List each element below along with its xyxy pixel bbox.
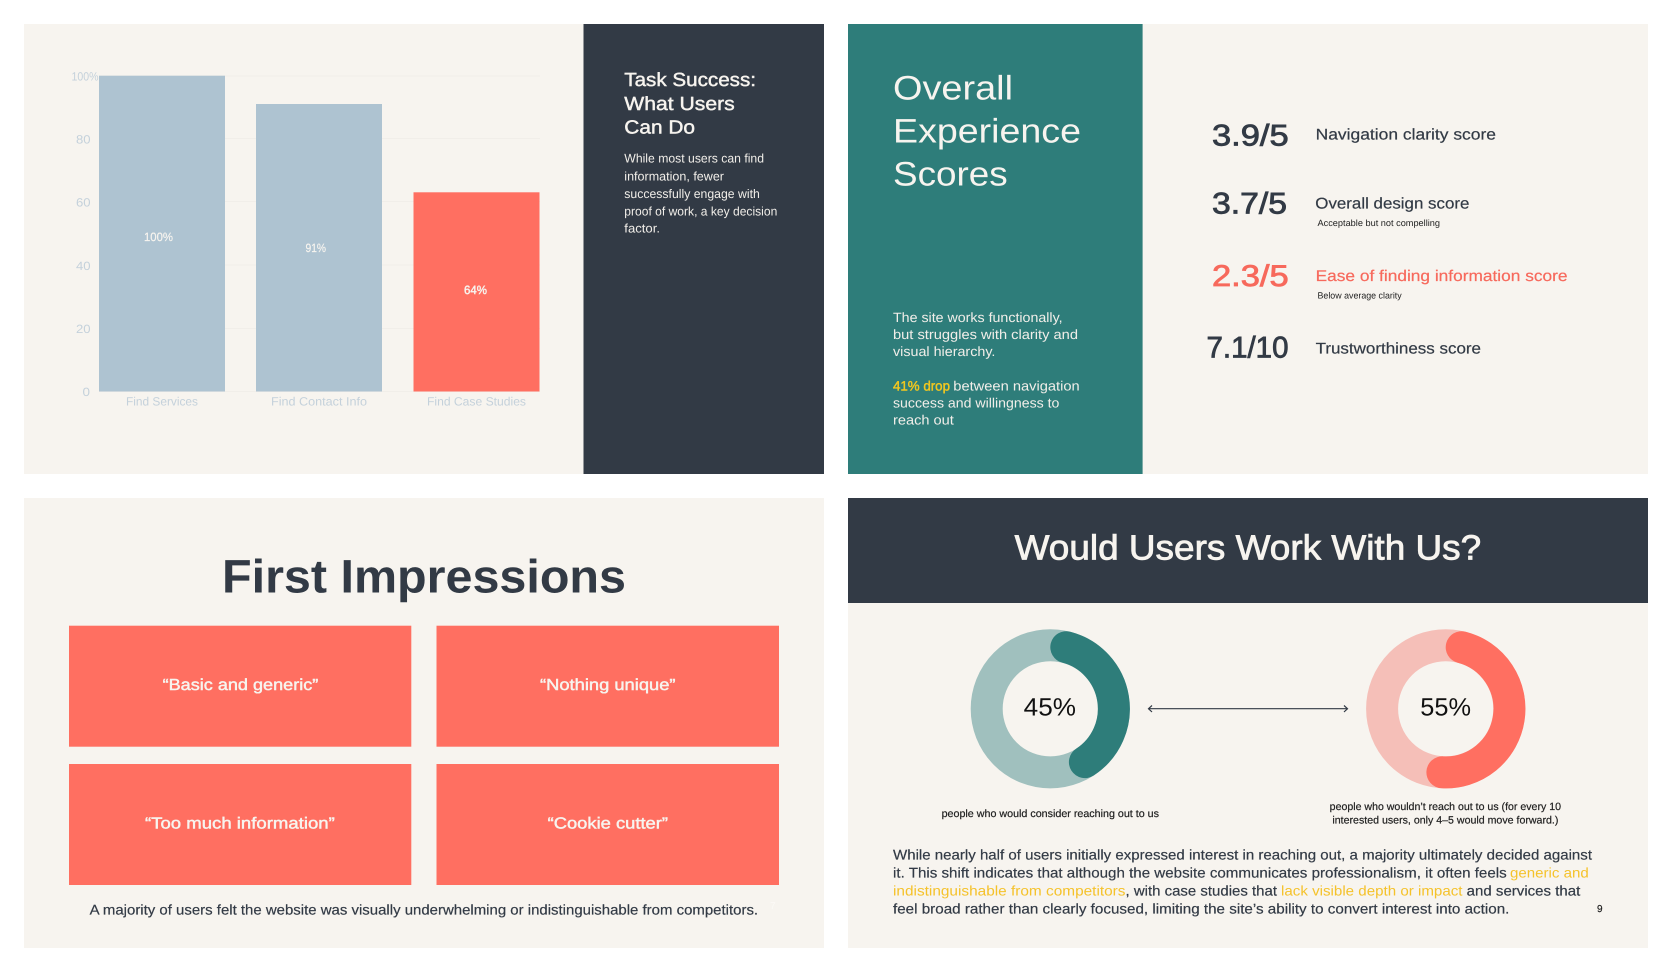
quote card: too much information: [69, 764, 411, 885]
body text: information, fewer: [624, 169, 724, 183]
donut: 45%: [987, 645, 1114, 772]
bar: find case studies: 64%: [464, 283, 487, 297]
y axis labels: 60: [76, 196, 91, 210]
quote card: nothing unique: “Nothing unique”: [540, 677, 676, 694]
body paragraph: indistinguishable from competitors: [893, 882, 1126, 898]
body text: factor.: [624, 222, 660, 236]
score: trustworthiness: 7.1/10: [1206, 331, 1288, 364]
heading: [624, 70, 756, 139]
body paragraph: lack visible depth or impact: [1281, 882, 1463, 898]
bar chart: [72, 70, 540, 408]
y axis labels: 100%: [72, 70, 99, 84]
score: overall design: Overall design score: [1315, 196, 1469, 213]
heading: Can Do: [624, 118, 695, 139]
page number: 7: [770, 901, 776, 912]
score: ease of finding information: Ease of finding information score: [1316, 268, 1568, 285]
y axis labels: [72, 70, 99, 399]
heading: Scores: [893, 155, 1008, 193]
caption: 55%: interested users, only 4–5 would move forward.): [1332, 814, 1558, 826]
caption: 55%: [1330, 801, 1561, 826]
score: navigation clarity: Navigation clarity score: [1316, 127, 1496, 144]
score: ease of finding information: Below average clarity: [1318, 290, 1402, 300]
heading: Task Success:: [624, 70, 756, 91]
score: ease of finding information: [1212, 260, 1568, 300]
body paragraph: feel broad rather than clearly focused, limiting the site’s ability to convert interest into action.: [893, 900, 1509, 916]
body text: successfully engage with: [624, 187, 760, 201]
caption: 45%: people who would consider reaching out to us: [942, 808, 1159, 820]
side panel: teal summary: [848, 24, 1143, 474]
body paragraph: and services that: [1467, 882, 1580, 898]
summary text: [893, 310, 1078, 359]
body paragraph: [893, 846, 1592, 916]
donut: 55%: [1382, 645, 1509, 772]
panel: would users work with us: [848, 498, 1648, 948]
x axis labels: Find Case Studies: [427, 394, 526, 408]
body text: proof of work, a key decision: [624, 204, 777, 218]
quote card: basic and generic: [69, 626, 411, 747]
heading: [893, 69, 1081, 193]
body text: [624, 152, 777, 236]
quote card: cookie cutter: “Cookie cutter”: [548, 815, 668, 832]
y axis labels: 20: [76, 322, 91, 336]
heading: What Users: [624, 94, 735, 115]
summary text: The site works functionally,: [893, 310, 1063, 325]
highlight text: 41% drop: 41% drop: [893, 378, 950, 393]
quote card: too much information: “Too much information”: [145, 815, 335, 832]
donut: 45%: 45%: [1024, 693, 1076, 721]
bar: find case studies: [414, 192, 540, 392]
page number: 9: [1597, 904, 1603, 915]
quote card: cookie cutter: [436, 764, 779, 885]
score: navigation clarity: 3.9/5: [1212, 120, 1289, 153]
score: navigation clarity: [1212, 120, 1496, 153]
highlight text: 41% drop: reach out: [893, 412, 954, 427]
score: overall design: 3.7/5: [1212, 187, 1287, 220]
side panel: task success text: [584, 24, 824, 474]
score: ease of finding information: 2.3/5: [1212, 260, 1289, 293]
bar: find services: [99, 76, 225, 391]
body paragraph: generic and: [1510, 864, 1589, 880]
header band: [848, 498, 1648, 603]
y axis labels: 80: [76, 132, 91, 146]
highlight text: 41% drop: [893, 378, 1080, 427]
highlight text: 41% drop: between navigation: [953, 378, 1080, 393]
summary text: visual hierarchy.: [893, 344, 995, 359]
y axis labels: 40: [76, 259, 91, 273]
donut: 55%: 55%: [1420, 693, 1471, 721]
heading: Overall: [893, 69, 1013, 107]
score: overall design: Acceptable but not compelling: [1318, 218, 1440, 228]
panel: overall experience scores: [848, 24, 1648, 474]
body paragraph: , with case studies that: [1126, 882, 1277, 898]
summary text: but struggles with clarity and: [893, 327, 1078, 342]
caption: A majority of users felt the website was visually underwhelming or indistinguishable from competitors.: [90, 902, 758, 918]
body text: While most users can find: [624, 152, 764, 166]
score: trustworthiness: [1206, 331, 1481, 364]
panel: task success: [24, 24, 824, 474]
header band: Would Users Work With Us?: [1015, 529, 1481, 568]
quote card: basic and generic: “Basic and generic”: [163, 677, 318, 694]
bar: find services: 100%: [144, 230, 173, 244]
bar: find contact info: 91%: [306, 241, 326, 255]
body paragraph: it. This shift indicates that although the website communicates professionalism, it often feels: [893, 864, 1507, 880]
quote card: nothing unique: [436, 626, 779, 747]
score: overall design: [1212, 187, 1469, 228]
heading: First Impressions: [222, 550, 626, 603]
x axis labels: Find Contact Info: [271, 394, 367, 408]
score: trustworthiness: Trustworthiness score: [1316, 340, 1481, 357]
bar: find contact info: [256, 104, 382, 392]
y axis labels: 0: [82, 385, 90, 399]
x axis labels: Find Services: [126, 394, 198, 408]
body paragraph: While nearly half of users initially expressed interest in reaching out, a majority ultimately decided against: [893, 846, 1592, 862]
caption: 55%: people who wouldn’t reach out to us (for every 10: [1330, 801, 1561, 813]
panel: first impressions: [24, 498, 824, 948]
highlight text: 41% drop: success and willingness to: [893, 395, 1059, 410]
heading: Experience: [893, 113, 1081, 151]
x axis labels: [126, 394, 526, 408]
arrow: [1148, 706, 1348, 712]
